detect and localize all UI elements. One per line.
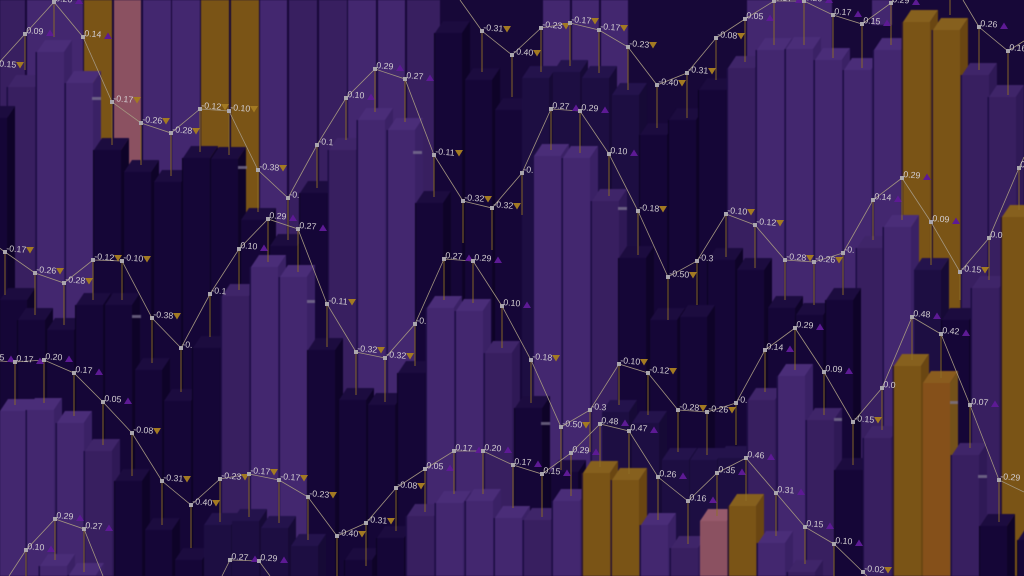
labels B: 0.29	[474, 252, 492, 264]
labels A: 0.10	[347, 89, 365, 101]
labels C: 0.17	[75, 364, 93, 376]
labels D: 0.17	[834, 6, 852, 18]
labels C: -0.08	[397, 479, 418, 491]
labels A: -0.18	[639, 202, 660, 214]
labels E: 0.27	[85, 520, 103, 532]
labels B: -0.32	[357, 343, 378, 355]
labels B: 0.27	[445, 250, 463, 262]
background columns	[0, 0, 892, 335]
labels A: -0.32	[493, 199, 514, 211]
labels B: -0.10	[620, 355, 641, 367]
labels B: -0.12	[649, 364, 670, 376]
labels C: -0.23	[309, 488, 330, 500]
labels C: -0.17	[280, 471, 301, 483]
labels B: -0.	[737, 394, 748, 405]
labels B: 0.42	[942, 325, 960, 337]
bar row: front rank	[0, 398, 1024, 576]
labels E: 0.29	[56, 510, 74, 522]
labels B: -0.10	[123, 252, 144, 264]
labels B: -0.	[182, 339, 193, 350]
labels A: 0.27	[406, 70, 424, 82]
line series C	[0, 351, 892, 576]
labels C: -0.31	[163, 472, 184, 484]
line C	[0, 360, 867, 576]
labels B: 0.29	[796, 319, 814, 331]
labels E	[24, 510, 113, 553]
labels A: -0.3	[698, 252, 714, 263]
labels B: 0.48	[913, 308, 931, 320]
labels B: -0.28	[679, 401, 700, 413]
line E	[9, 519, 103, 576]
line series A	[0, 0, 1024, 320]
labels B: 0.09	[825, 363, 843, 375]
labels B	[3, 210, 1021, 483]
labels A: 0.29	[581, 102, 599, 114]
line series B	[0, 210, 1024, 522]
labels B: -0.29	[1000, 471, 1021, 483]
labels C: 0.48	[601, 415, 619, 427]
labels B: -0.	[416, 315, 427, 326]
labels A: -0.	[523, 164, 534, 175]
labels B: 0.29	[269, 210, 287, 222]
labels B: -0.3	[591, 401, 607, 412]
labels A: -0.10	[230, 102, 251, 114]
labels A: 0.29	[376, 60, 394, 72]
drop lines A	[25, 2, 1019, 320]
labels B: 0.10	[503, 297, 521, 309]
labels D: -0.31	[483, 22, 504, 34]
drop lines C	[15, 360, 834, 576]
labels A	[0, 0, 1024, 280]
labels C: 0.15	[543, 465, 561, 477]
labels E: 0.10	[27, 541, 45, 553]
labels A: -0.38	[259, 161, 280, 173]
labels B: -0.50	[562, 418, 583, 430]
labels B: 0.14	[766, 341, 784, 353]
labels A: -0.10	[727, 205, 748, 217]
labels A: -0.12	[201, 100, 222, 112]
labels A: 0.0	[990, 229, 1003, 240]
labels A: -0.11	[435, 146, 455, 158]
labels A: 0.09	[26, 25, 44, 37]
labels F	[228, 551, 288, 564]
labels A: -0.12	[756, 216, 777, 228]
labels D: -0.31	[688, 64, 709, 76]
labels A: -0.32	[464, 192, 485, 204]
labels C: -0.23	[221, 470, 242, 482]
labels A: 0.27	[552, 100, 570, 112]
labels D: -0.23	[629, 38, 650, 50]
drop lines E	[26, 519, 84, 576]
labels C: 0.05	[426, 460, 444, 472]
labels C: -0.17	[250, 465, 271, 477]
line series D	[460, 0, 1024, 128]
labels A: 0.29	[903, 169, 921, 181]
labels D: -0.17	[571, 14, 592, 26]
labels A: -0.28	[786, 251, 807, 263]
labels B: -0.15	[854, 413, 875, 425]
line D	[460, 0, 893, 85]
labels A: 0.14	[874, 191, 892, 203]
labels C: 0.29	[572, 444, 590, 456]
labels B: -0.28	[65, 274, 86, 286]
labels B: -0.17	[6, 243, 27, 255]
labels B: 0.27	[299, 220, 317, 232]
labels B: 0.10	[240, 240, 258, 252]
labels C: 0.15	[806, 518, 824, 530]
labels C: 0.20	[45, 351, 63, 363]
labels A: -0.15	[961, 263, 982, 275]
labels C: 0.31	[777, 484, 795, 496]
bar row: third rank	[0, 255, 987, 576]
line series E bottom left	[9, 510, 113, 576]
labels B: -0.32	[386, 349, 407, 361]
labels C: -0.31	[367, 514, 388, 526]
labels C: -0.40	[192, 496, 213, 508]
labels A: -0.26	[815, 253, 836, 265]
labels D	[480, 0, 1024, 88]
labels B: -0.26	[36, 264, 57, 276]
labels C: 0.10	[835, 535, 853, 547]
labels D: 0.26	[980, 18, 998, 30]
labels D: -0.17	[600, 21, 621, 33]
line A	[0, 2, 1024, 277]
labels D: 0.15	[863, 15, 881, 27]
labels A: -0.26	[142, 114, 163, 126]
labels A: -0.	[289, 189, 300, 200]
labels B: -0.1	[211, 285, 227, 296]
labels A: -0.50	[669, 268, 690, 280]
labels A: -0.1	[318, 136, 334, 147]
labels C: 0.17	[455, 442, 473, 454]
line D right fragment	[963, 0, 1024, 51]
labels B: -0.11	[328, 295, 348, 307]
labels C	[0, 351, 892, 575]
labels C: 0.46	[747, 449, 765, 461]
line B	[0, 219, 1024, 492]
labels A: 0.10	[610, 145, 628, 157]
labels B: -0.18	[532, 351, 553, 363]
far purple columns	[0, 0, 892, 335]
labels C: 0.17	[514, 456, 532, 468]
labels A: -0.28	[172, 124, 193, 136]
drop lines D	[482, 0, 1008, 128]
labels B: -0.12	[94, 251, 115, 263]
far gold and pink columns	[84, 0, 259, 295]
labels C: 0.35	[718, 464, 736, 476]
labels C: 0.26	[659, 468, 677, 480]
labels D: 0.05	[746, 10, 764, 22]
labels B: -0.38	[153, 309, 174, 321]
labels F: 0.27	[231, 551, 249, 563]
labels C: 0.20	[484, 442, 502, 454]
labels C: 0.17	[16, 353, 34, 365]
labels B: -0.26	[708, 403, 729, 415]
labels A: 0.14	[84, 28, 102, 40]
labels D: -0.40	[658, 76, 679, 88]
labels C: 0.05	[104, 393, 122, 405]
labels D: -0.08	[717, 29, 738, 41]
labels C: 0.47	[630, 422, 648, 434]
bar row: second rank	[93, 108, 1024, 576]
labels F: 0.29	[260, 552, 278, 564]
labels C: -0.02	[864, 563, 885, 575]
labels C: -0.40	[338, 527, 359, 539]
labels A: 0.09	[932, 213, 950, 225]
labels B: 0.07	[971, 396, 989, 408]
drop lines B	[5, 219, 999, 522]
line series F bottom centre	[222, 551, 288, 576]
labels C: -0.08	[133, 424, 154, 436]
labels C: 0.16	[689, 492, 707, 504]
labels A: -0.	[844, 244, 855, 255]
labels A: -0.17	[113, 93, 134, 105]
line F	[222, 560, 270, 576]
labels D: -0.40	[513, 46, 534, 58]
small side stripes	[92, 97, 987, 478]
labels B: 0.0	[883, 379, 896, 390]
labels D: -0.23	[542, 19, 563, 31]
